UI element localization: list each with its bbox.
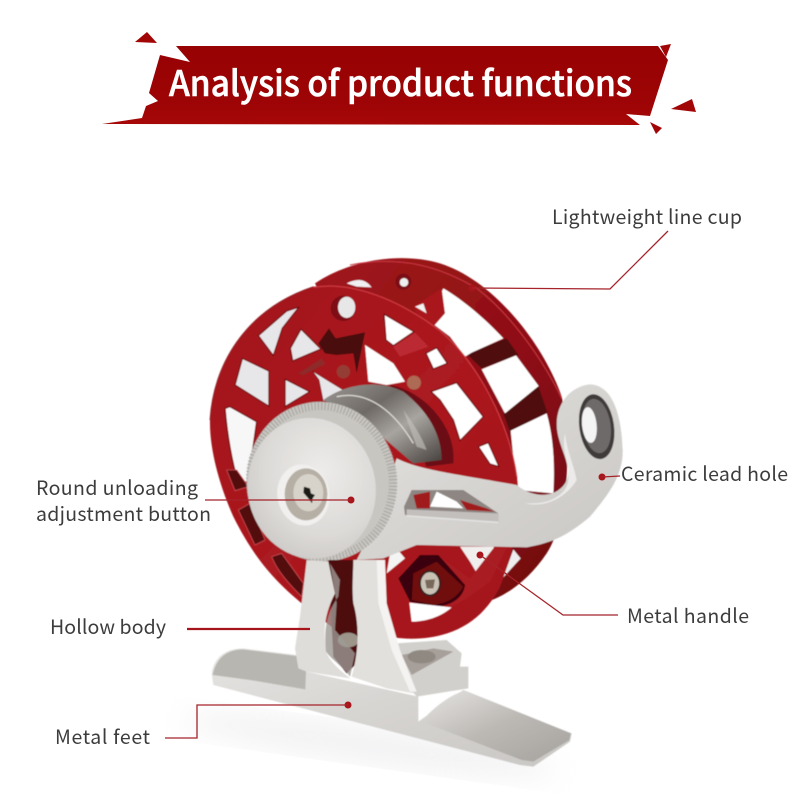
banner ribbon xyxy=(102,32,696,134)
leader line xyxy=(468,231,668,292)
label: adjustment button xyxy=(36,498,211,527)
callout: ceramic lead hole xyxy=(598,458,788,487)
callout: metal handle xyxy=(476,552,749,629)
callout: lightweight line cup xyxy=(468,201,742,292)
back spool wheel xyxy=(315,258,567,603)
foot shadow xyxy=(179,701,561,789)
hollow body xyxy=(295,560,417,693)
label: Metal feet xyxy=(55,721,151,750)
lower-right hub window and screw xyxy=(387,547,521,622)
label: Ceramic lead hole xyxy=(621,458,788,487)
upper-right windows xyxy=(365,314,499,467)
title banner xyxy=(102,32,696,134)
front spool wheel xyxy=(210,285,521,639)
leader line xyxy=(476,552,618,615)
metal feet xyxy=(212,640,572,767)
callout: metal feet xyxy=(55,702,352,750)
label: Metal handle xyxy=(627,600,749,629)
fishing reel product photo xyxy=(210,258,623,767)
callout: round unloading adjustment button xyxy=(36,472,354,527)
label: Round unloading xyxy=(36,472,198,501)
upper-left windows xyxy=(225,307,365,483)
knurled adjustment knob xyxy=(234,390,409,573)
leader line xyxy=(165,702,352,738)
label: Hollow body xyxy=(50,611,166,640)
lower-left dark windows xyxy=(227,470,303,597)
leader line xyxy=(187,628,310,630)
title text: Analysis of product functions xyxy=(169,56,632,107)
hub cylinder xyxy=(323,384,454,467)
leader line xyxy=(598,474,620,480)
leader line xyxy=(205,496,354,504)
metal arm with ceramic line guide xyxy=(357,384,623,560)
label: Lightweight line cup xyxy=(552,201,742,230)
